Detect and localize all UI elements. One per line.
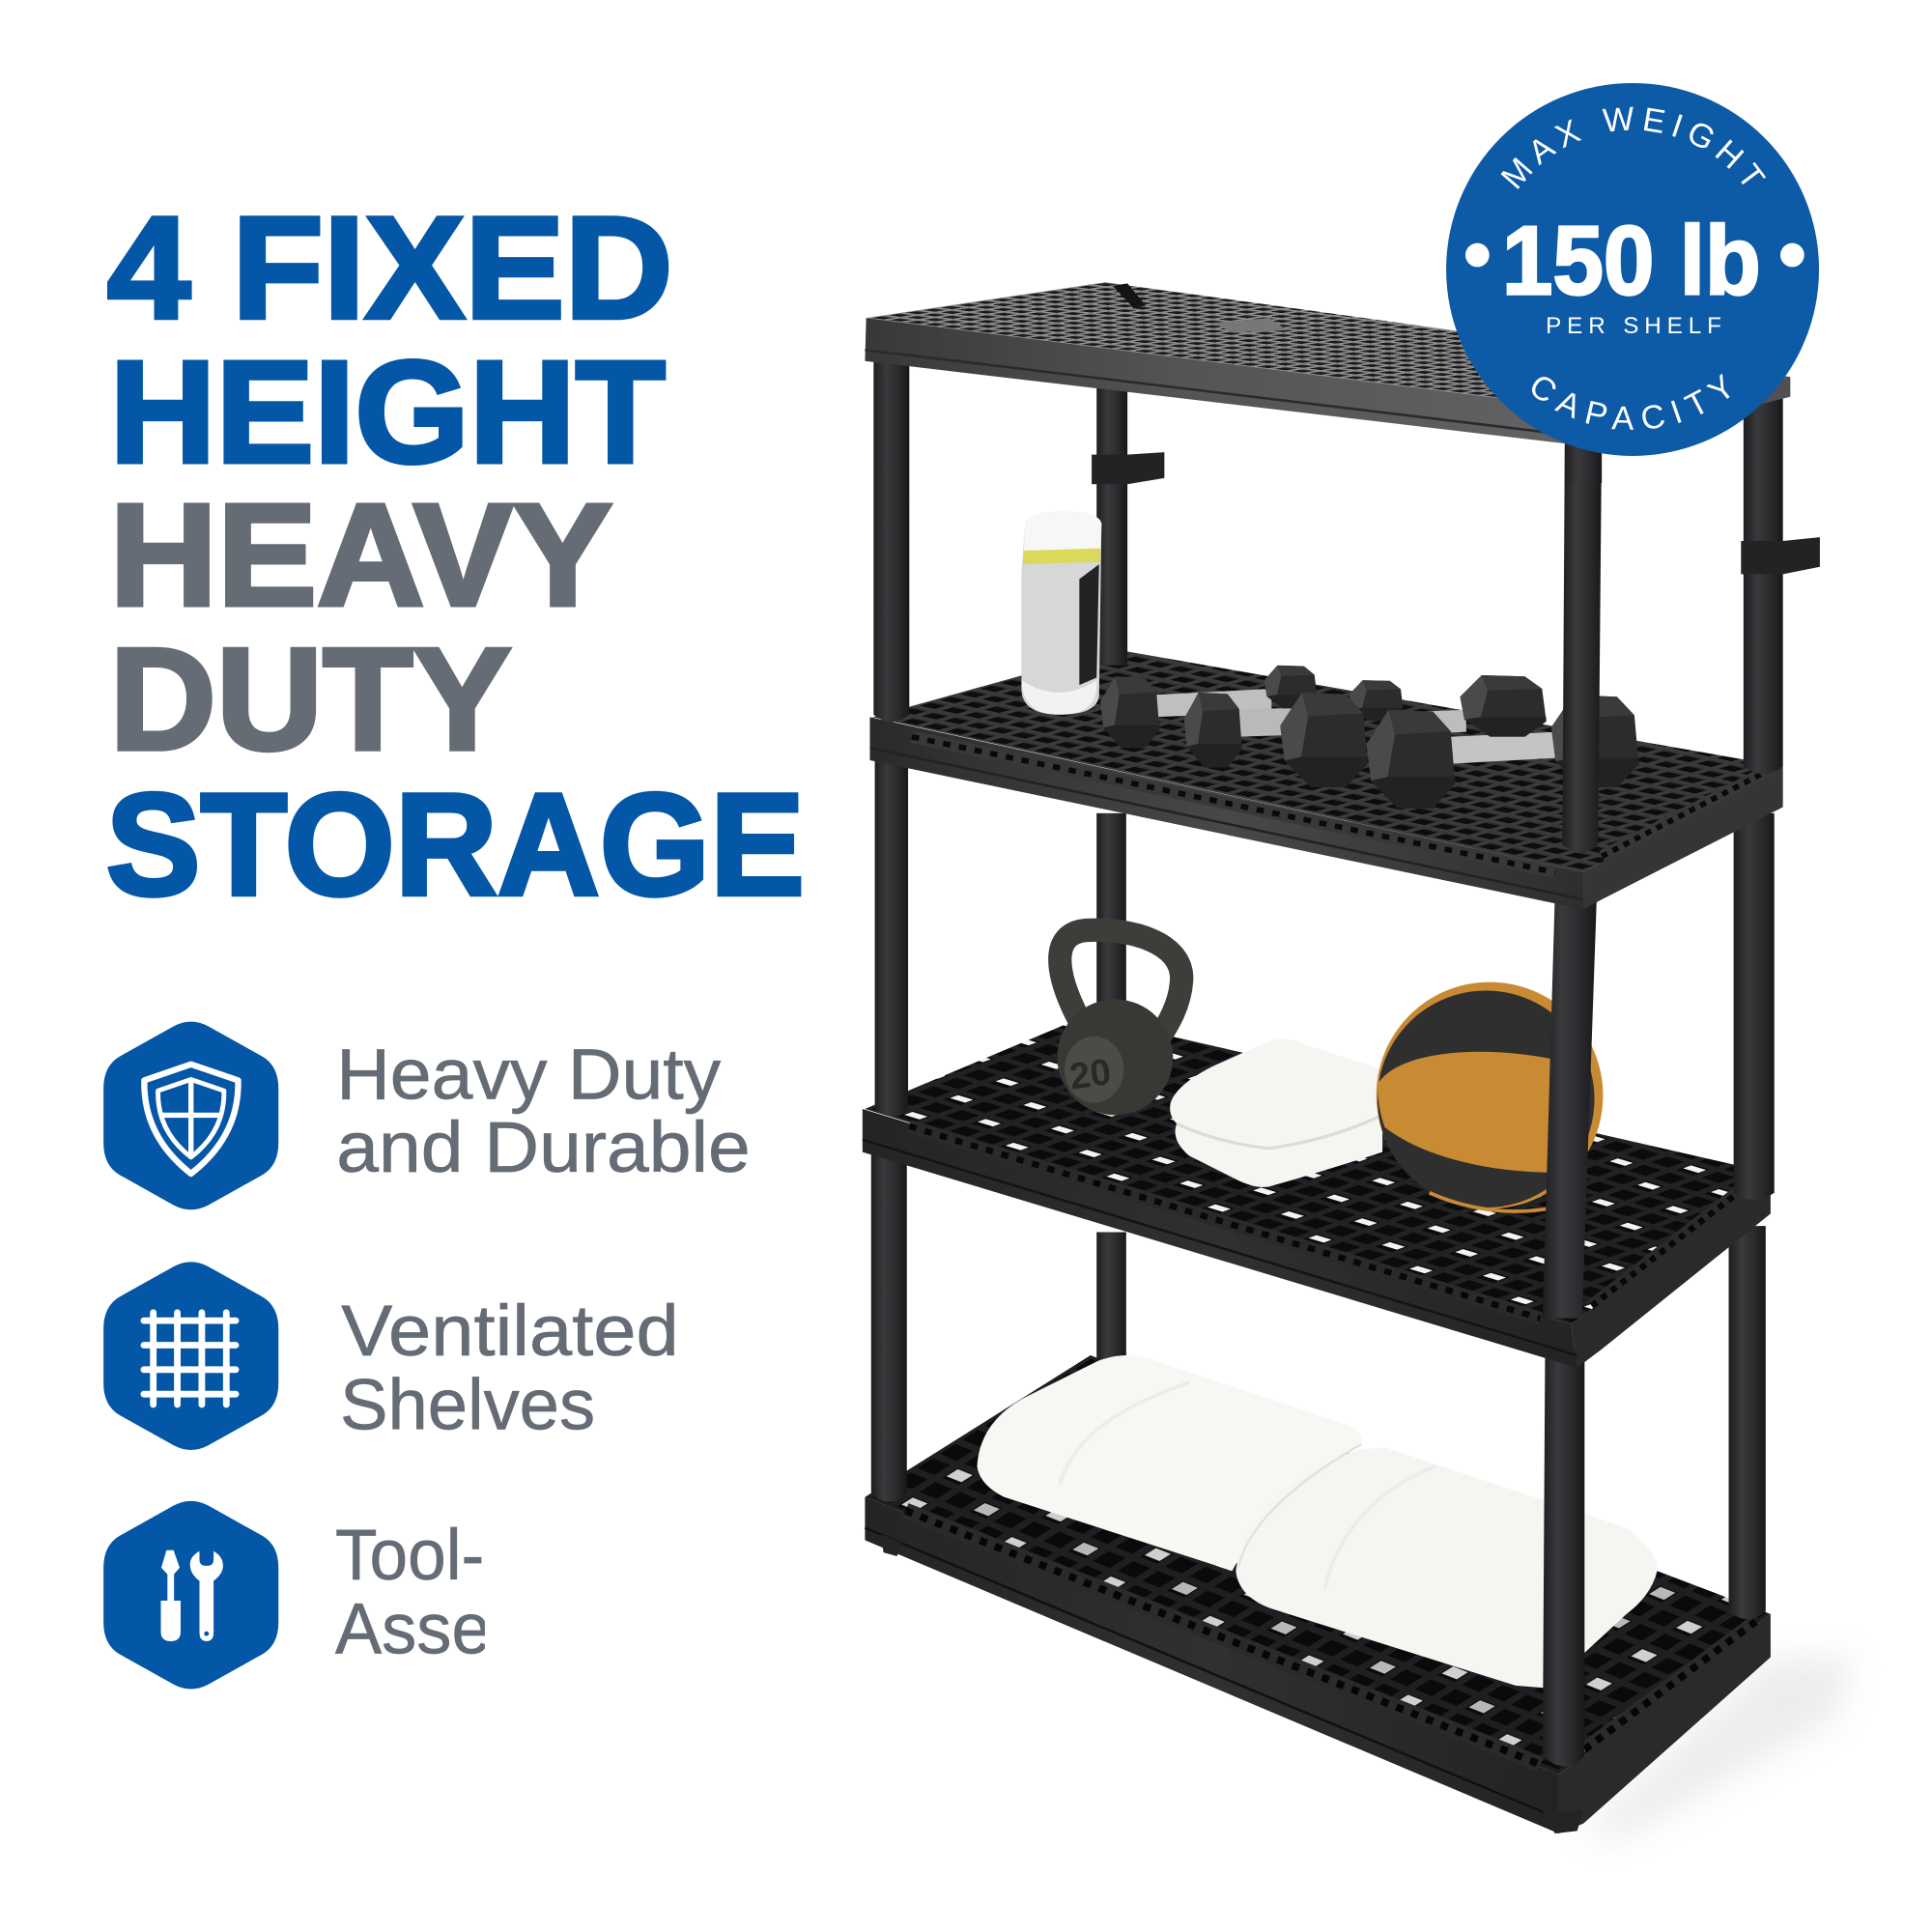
medicine ball xyxy=(1377,982,1603,1211)
title xyxy=(106,186,805,925)
title: HEIGHT xyxy=(110,330,666,493)
large towels xyxy=(977,1355,1658,1688)
front-right post collar over top shelf xyxy=(1565,446,1602,483)
text: ventilated shelves xyxy=(340,1291,679,1445)
kettlebell xyxy=(1057,930,1181,1115)
text: heavy duty and durable xyxy=(336,1035,751,1187)
bottom shelf xyxy=(865,1355,1771,1833)
front posts, middle tier xyxy=(875,752,1597,1319)
feature: tool-free assembly xyxy=(103,1501,491,1689)
back posts, upper tier xyxy=(1096,388,1783,774)
badge caption: PER SHELF xyxy=(1546,313,1721,339)
icon: tools hexagon xyxy=(103,1501,278,1689)
wipes canister xyxy=(1021,511,1101,715)
icon: grid hexagon xyxy=(103,1262,278,1450)
title: STORAGE xyxy=(106,763,805,925)
back posts, middle tier xyxy=(1096,813,1775,1200)
text: clipped tool-free assembly xyxy=(334,1526,485,1654)
front posts, lower tier xyxy=(871,1146,1584,1766)
icon: shield hexagon xyxy=(103,1022,278,1209)
text: ventilated shelves: Shelves xyxy=(340,1365,595,1445)
badge value: 150 lb xyxy=(1502,207,1761,315)
wall brackets xyxy=(1092,452,1820,574)
title: DUTY xyxy=(110,618,511,781)
badge: 150 lb per shelf xyxy=(1446,83,1820,456)
back posts, lower tier xyxy=(1096,1226,1766,1619)
text: ventilated shelves: Ventilated xyxy=(341,1291,679,1371)
badge arc text: capacity: CAPACITY xyxy=(1532,373,1729,430)
kettlebell: 20 xyxy=(1067,1051,1114,1098)
title: HEAVY xyxy=(110,473,612,636)
second shelf xyxy=(870,649,1783,909)
top shelf xyxy=(865,282,1790,443)
badge arc text: max weight: MAX WEIGHT xyxy=(1501,106,1766,189)
badge dots xyxy=(1465,243,1804,267)
third shelf xyxy=(863,1016,1771,1368)
text: clipped tool-free assembly: Tool- xyxy=(335,1515,484,1595)
text: heavy duty and durable: Heavy Duty xyxy=(336,1035,721,1115)
front posts, upper tier xyxy=(873,357,1602,853)
small folded towel xyxy=(1170,1038,1382,1187)
floor shadow xyxy=(1577,1658,1855,1836)
feature: heavy duty and durable xyxy=(103,1022,751,1209)
dumbbells xyxy=(1100,666,1638,809)
product: shelving unit xyxy=(863,282,1855,1836)
text: clipped tool-free assembly: Asse xyxy=(335,1589,491,1669)
feature: ventilated shelves xyxy=(103,1262,679,1450)
text: heavy duty and durable: and Durable xyxy=(336,1107,751,1187)
title: 4 FIXED xyxy=(107,186,672,349)
